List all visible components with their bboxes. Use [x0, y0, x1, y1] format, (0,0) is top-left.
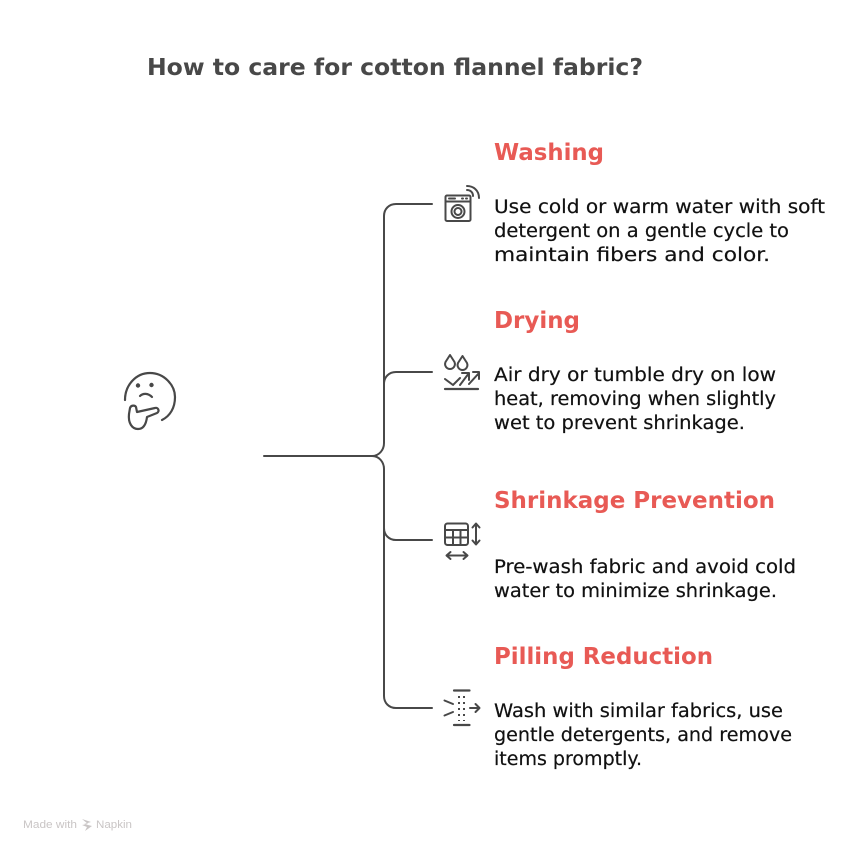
description: washing	[494, 197, 825, 266]
description: shrinkage prevention: Pre-wash fabric and avoid cold	[494, 557, 796, 578]
heading: pilling reduction: Pilling Reduction	[494, 644, 713, 670]
item: drying	[445, 308, 776, 434]
description: drying	[494, 365, 776, 434]
icon: filter with arrow	[444, 690, 480, 725]
description: washing: detergent on a gentle cycle to	[494, 221, 789, 242]
item: pilling reduction	[444, 644, 792, 770]
description: drying: heat, removing when slightly	[494, 389, 776, 410]
description: shrinkage prevention: water to minimize shrinkage.	[494, 581, 777, 602]
description: washing: maintain fibers and color.	[494, 245, 770, 266]
heading: washing: Washing	[494, 140, 604, 166]
icon: grid with size arrows	[445, 524, 480, 559]
description: pilling reduction: Wash with similar fabrics, use	[494, 701, 783, 722]
icon: thinking face	[125, 373, 175, 429]
icon: smart washing machine	[446, 186, 479, 221]
item: washing	[446, 140, 825, 266]
description: pilling reduction: items promptly.	[494, 749, 642, 770]
description: drying: wet to prevent shrinkage.	[494, 413, 745, 434]
heading: drying: Drying	[494, 308, 580, 334]
description: washing: Use cold or warm water with soft	[494, 197, 825, 218]
heading: shrinkage prevention: Shrinkage Prevention	[494, 488, 775, 514]
item: shrinkage prevention	[445, 488, 796, 602]
watermark: made with napkin: Made with	[23, 819, 77, 831]
watermark: made with napkin: Napkin	[96, 819, 132, 831]
icon: napkin logo	[82, 819, 92, 831]
icon: water drops and arrows	[445, 355, 479, 389]
description: pilling reduction: gentle detergents, and remove	[494, 725, 792, 746]
description: drying: Air dry or tumble dry on low	[494, 365, 776, 386]
connector tree	[264, 204, 432, 708]
title: How to care for cotton flannel fabric?	[147, 55, 643, 81]
description: pilling reduction	[494, 701, 792, 770]
description: shrinkage prevention	[494, 557, 796, 602]
watermark: made with napkin	[23, 819, 132, 831]
